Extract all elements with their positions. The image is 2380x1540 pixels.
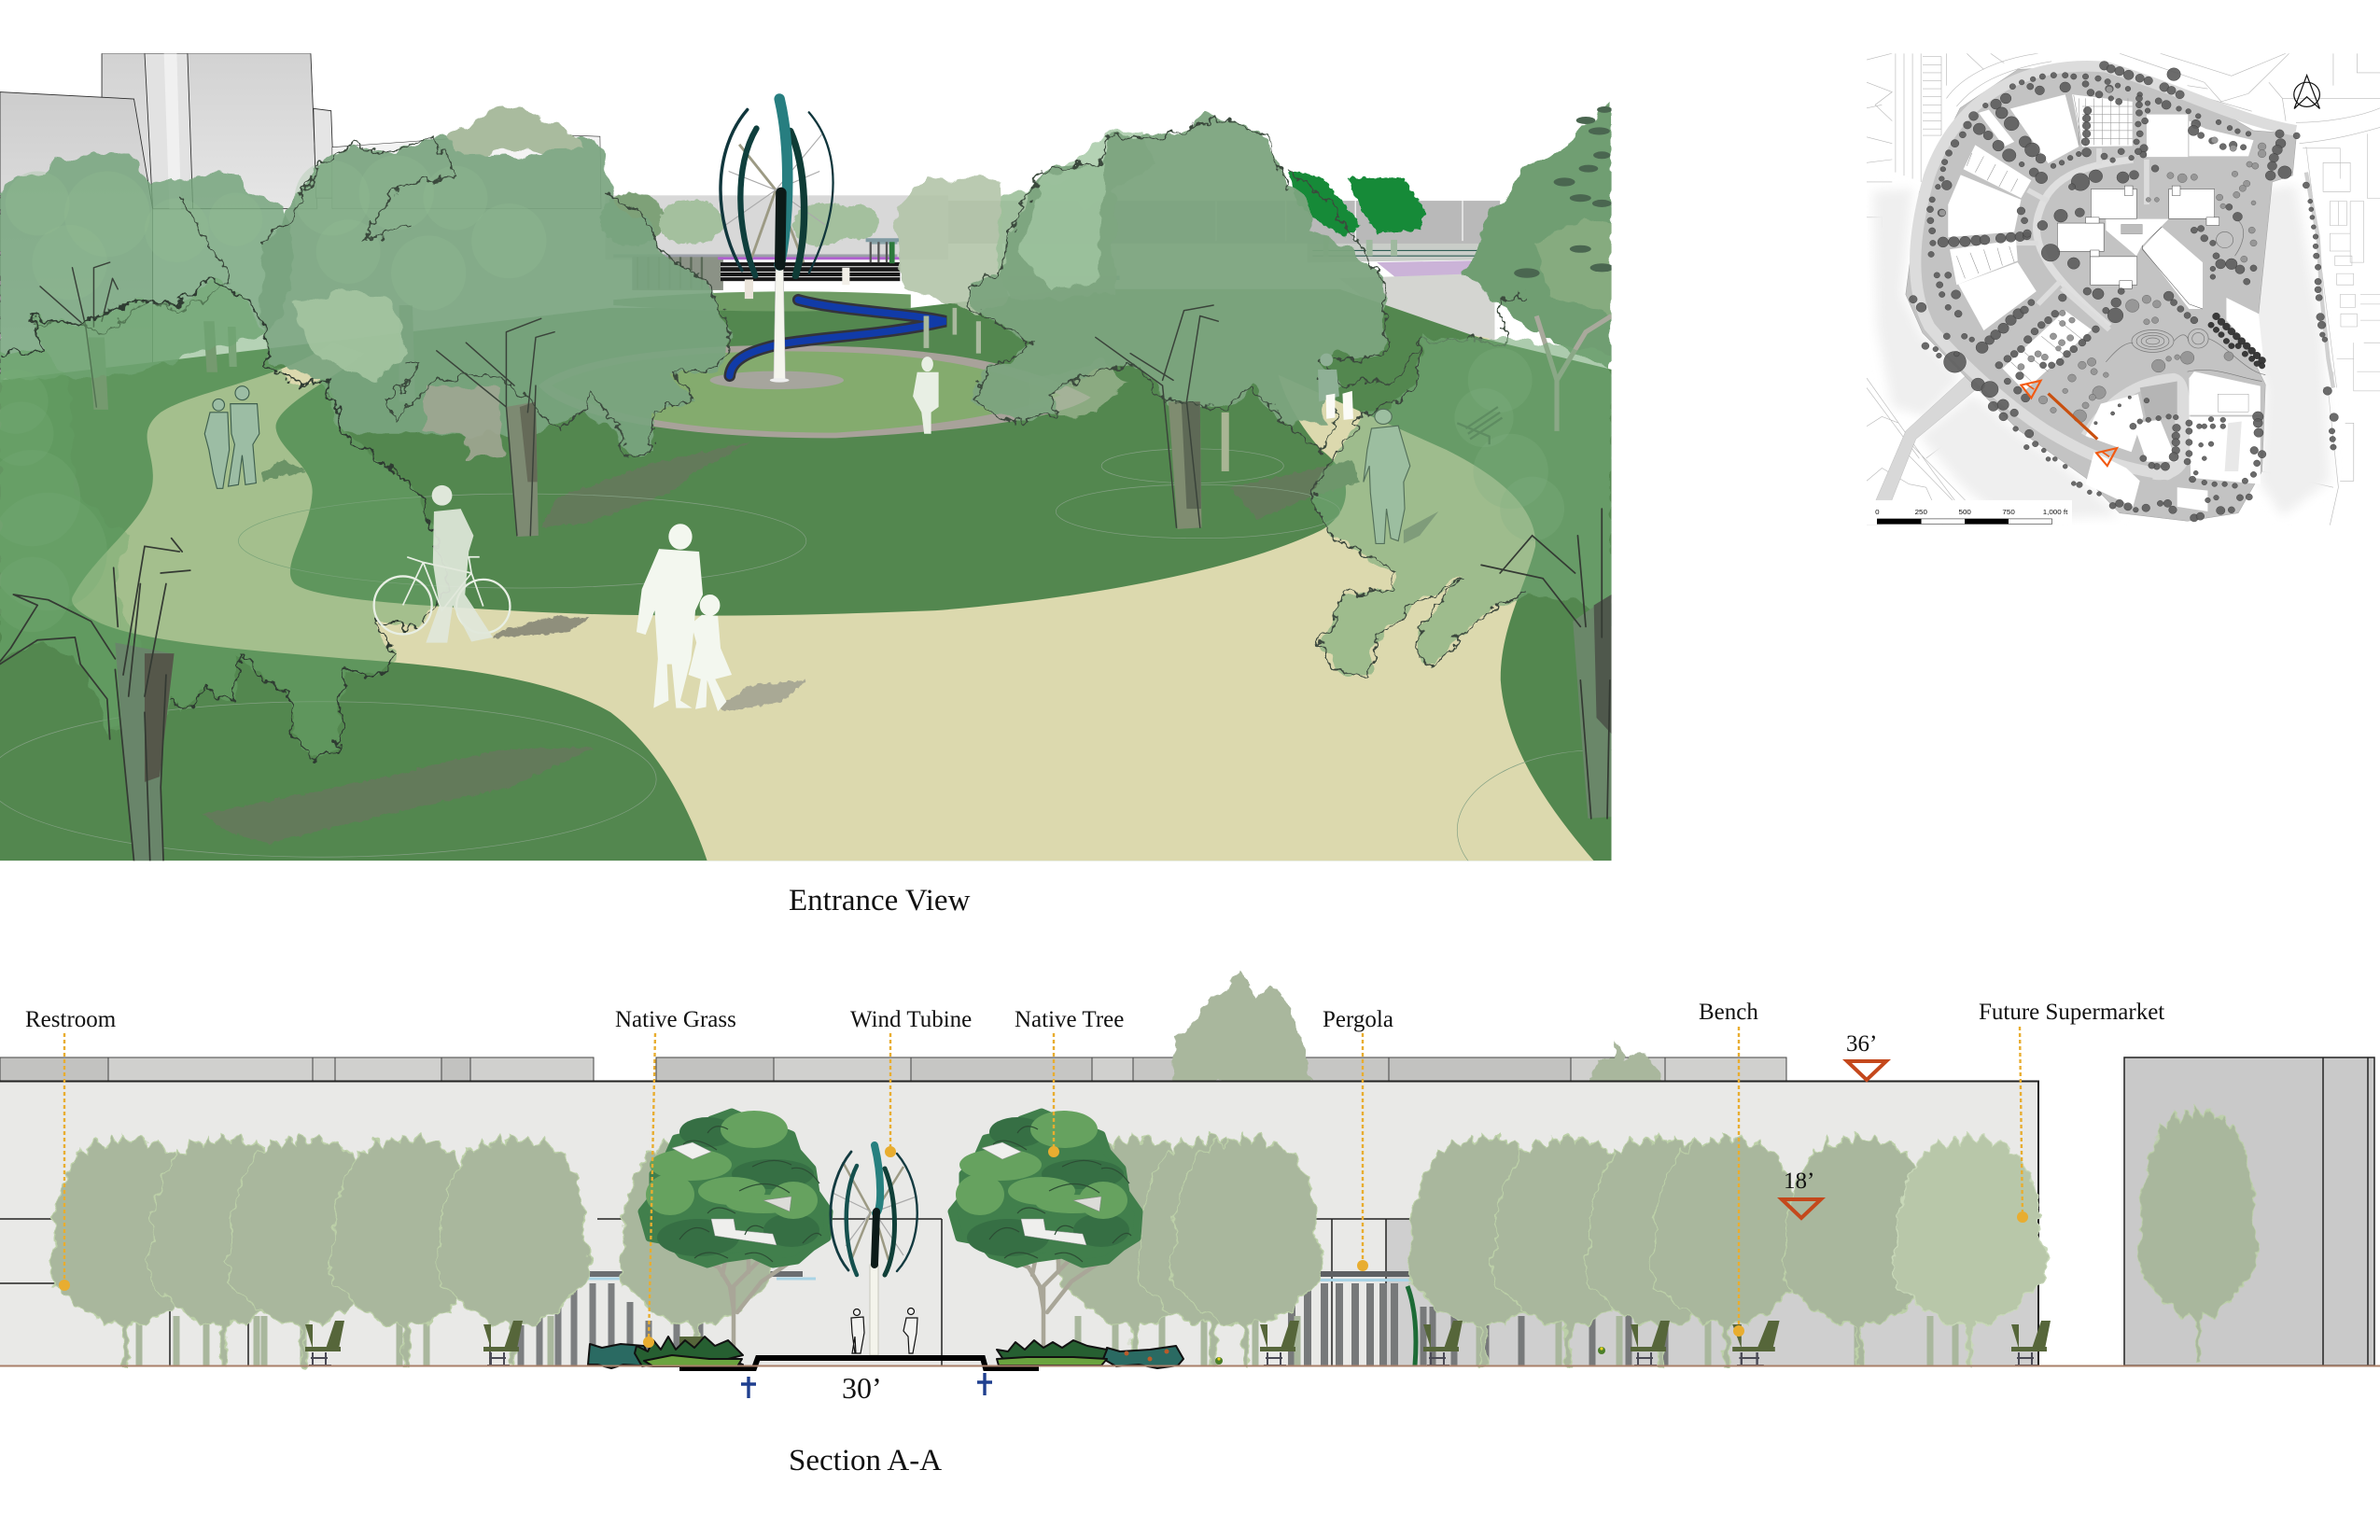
small flower shrubs bbox=[1215, 1347, 1605, 1365]
entrance road bbox=[1867, 371, 1983, 525]
people: cyclist bbox=[374, 485, 510, 643]
people: couple on left path bbox=[204, 386, 259, 488]
tree canopy: upper right tree bbox=[1463, 102, 1612, 370]
dimension: walkway width: 30’ bbox=[842, 1371, 882, 1405]
people figures on walkway bbox=[851, 1309, 917, 1353]
parking wedges bbox=[1948, 94, 2254, 391]
tree canopy: far centre pale trees bbox=[895, 131, 1157, 311]
dimension marks: section crosses bbox=[741, 1373, 992, 1398]
callout: Native Tree: Native Tree bbox=[1015, 1007, 1124, 1032]
pale tree rows bbox=[49, 1106, 2260, 1366]
site plan trees bbox=[1909, 61, 2338, 522]
ground line bbox=[0, 1365, 2380, 1366]
foreground left tree canopy bbox=[0, 278, 450, 758]
tree canopies: background left group bbox=[0, 102, 1125, 458]
heading: section caption: Section A-A bbox=[789, 1444, 942, 1477]
small distant trees bbox=[600, 192, 878, 246]
wind turbine elevation bbox=[831, 1145, 917, 1355]
scale bar: 0 bbox=[1875, 508, 1880, 516]
scale bar bbox=[1867, 500, 2072, 525]
heading: entrance view caption: Entrance View bbox=[789, 884, 971, 917]
icon: wind turbine bbox=[721, 99, 833, 383]
buildings bbox=[2057, 186, 2263, 362]
inner circular road bbox=[2037, 160, 2133, 327]
scale bar: 750 bbox=[2002, 508, 2015, 516]
dark allee tree rows bbox=[2208, 313, 2266, 369]
callout: Restroom: Restroom bbox=[25, 1007, 117, 1032]
lighter tree in front of supermarket bbox=[1893, 1133, 2048, 1366]
callout: Pergola bbox=[1323, 1007, 1393, 1271]
distant rooftop band bbox=[0, 1057, 1786, 1082]
callout: Wind Tubine: Wind Tubine bbox=[850, 1007, 972, 1032]
right future supermarket building bbox=[2124, 1057, 2374, 1365]
sidewalk profile bbox=[679, 1358, 1039, 1368]
tree shadows on lawn bbox=[203, 441, 1359, 844]
native grass shrubs right bbox=[997, 1340, 1183, 1368]
foreground left tree outline bbox=[0, 278, 450, 758]
callout: Bench bbox=[1699, 1000, 1758, 1337]
panel: site plan map bbox=[1867, 53, 2380, 525]
native trees bbox=[642, 1111, 1139, 1359]
callout: Native Grass: Native Grass bbox=[615, 1007, 736, 1032]
far plaza wall and garden bbox=[600, 192, 1500, 348]
soft cloud ground texture bbox=[1873, 185, 2330, 520]
river bbox=[730, 300, 945, 376]
foreground left trunk and branches bbox=[0, 539, 190, 861]
callout: Wind Tubine bbox=[850, 1007, 972, 1157]
lower site buildings bbox=[2086, 371, 2261, 511]
upper right trunk bbox=[1536, 315, 1612, 431]
pergolas bbox=[521, 1271, 1665, 1365]
scale bar: 250 bbox=[1915, 508, 1928, 516]
callout: Native Tree bbox=[1015, 1007, 1124, 1157]
bright green trees bbox=[1289, 170, 1425, 237]
right park bench bbox=[1457, 407, 1502, 444]
tree canopy: big centre right tree bbox=[971, 112, 1385, 423]
callout: Pergola: Pergola bbox=[1323, 1007, 1393, 1032]
foreground right trunk bbox=[1481, 509, 1612, 819]
scale bar: 1,000 ft bbox=[2043, 508, 2068, 516]
panel: entrance view perspective bbox=[0, 53, 1612, 861]
lawn bbox=[0, 289, 1612, 861]
callout: Future Supermarket: Future Supermarket bbox=[1979, 1000, 2164, 1025]
people: walker on right path bbox=[1364, 409, 1438, 543]
elevation marker: 18 ft: 18’ bbox=[1784, 1169, 1814, 1194]
right neighbourhood lots bbox=[2303, 133, 2380, 391]
callout: Native Grass bbox=[615, 1007, 736, 1348]
elevation marker: 36 ft: 36’ bbox=[1846, 1031, 1877, 1057]
beige walking path bbox=[72, 343, 1594, 861]
small pergola and figures in the plaza bbox=[745, 238, 899, 299]
upper right leaves bbox=[1514, 106, 1614, 278]
benches bbox=[305, 1321, 2051, 1365]
people: father and daughter bbox=[637, 524, 732, 711]
icon: north arrow bbox=[2294, 76, 2319, 108]
panel: section A-A drawing bbox=[0, 969, 2380, 1405]
foreground right tree canopy bbox=[1310, 337, 1612, 675]
callout: Bench: Bench bbox=[1699, 1000, 1758, 1025]
trees behind building bbox=[1172, 969, 1664, 1083]
tree sketches bbox=[40, 262, 1218, 536]
parking stall hatching bbox=[1956, 95, 2133, 382]
people: couple at far right path bbox=[1318, 354, 1353, 420]
campus footprint bbox=[1906, 64, 2297, 521]
scale bar: 500 bbox=[1959, 508, 1972, 516]
callout: Future Supermarket bbox=[1979, 1000, 2164, 1223]
lawn tree pit ellipses bbox=[0, 448, 1612, 861]
native grass shrubs left bbox=[588, 1337, 743, 1368]
main building wall bbox=[0, 1081, 2038, 1365]
people: walkers on far path bbox=[913, 357, 939, 434]
ring road bbox=[1915, 66, 2296, 474]
central lawn mound bbox=[539, 345, 1091, 438]
section cut line A-A bbox=[2021, 381, 2117, 466]
background tree trunks bbox=[89, 305, 1229, 471]
elevation marker: 18 ft bbox=[1782, 1169, 1821, 1218]
callout: Restroom bbox=[25, 1007, 117, 1291]
medium grey planting trees bbox=[1939, 86, 2266, 423]
background buildings bbox=[0, 53, 601, 380]
amphitheatre and plaza gardens bbox=[2106, 220, 2265, 382]
dark tree outline: left canopy bbox=[0, 120, 1527, 458]
trunks of mid trees bbox=[506, 401, 1201, 537]
foreground right tree outline bbox=[1310, 343, 1525, 675]
garden strip bbox=[613, 291, 911, 312]
pale tree trunks bbox=[139, 1316, 1955, 1365]
surrounding street lines bbox=[1867, 53, 2380, 525]
elevation marker: 36 ft bbox=[1846, 1031, 1886, 1080]
canopy scallop blobs bbox=[0, 155, 1564, 632]
